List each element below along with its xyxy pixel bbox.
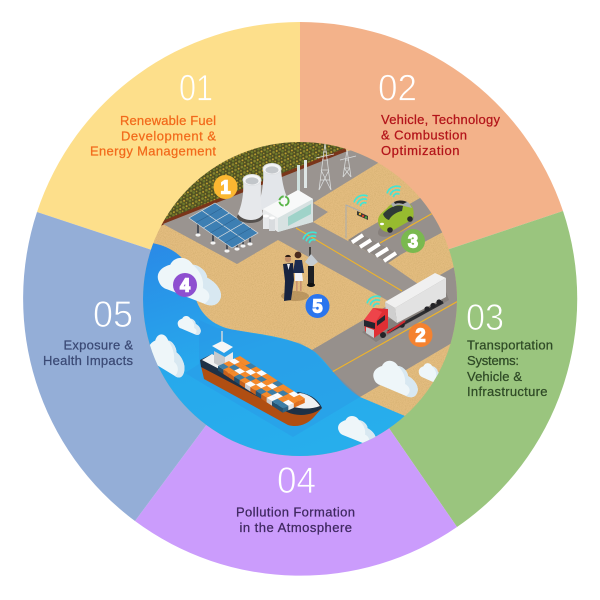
road shadow [362,292,449,342]
recycling mark [279,196,289,206]
label 03: Transportation [467,338,553,352]
trailer [385,273,446,323]
segment 04 background [135,299,457,576]
badge 3: 3 [408,232,418,252]
crosswalk [348,233,400,263]
wheels [380,299,442,338]
traffic signal [346,205,368,238]
solar panels [189,203,258,253]
label 02: & Combustion [381,128,467,142]
label 01: Renewable Fuel [120,113,216,128]
man [283,255,294,301]
container ship [200,331,322,426]
label 01 [90,113,216,159]
cloud behind badge 4 [158,258,221,305]
badge 2: 2 [415,326,426,346]
label 03 [467,338,553,399]
label 02: Optimization [381,143,460,158]
road centre lines [296,213,460,372]
hull band [200,354,322,415]
heading 02: 02 [378,68,417,108]
label 04: in the Atmosphere [240,520,352,535]
truck road [312,267,457,397]
small cloud over water [178,316,201,335]
transmission towers [316,143,356,190]
badge 4 [173,273,197,297]
green car [378,200,414,237]
badge 1 [214,175,238,199]
label 05: Health Impacts [43,353,134,368]
bridge block [212,331,233,369]
cloud at bottom water edge [338,416,376,445]
containers [218,356,305,413]
large cloud left edge [148,334,185,377]
panel supports [198,222,250,250]
label 05: Exposure & [64,338,133,352]
label 03: Vehicle & [467,369,522,384]
woman [293,252,304,291]
badge 3 [401,229,425,253]
cab [364,308,405,338]
storage tanks [263,214,275,231]
small cloud at lower right edge [419,363,443,384]
power plant [237,160,313,232]
chassis [388,302,443,332]
wifi signal: signal light [353,194,368,206]
truck [362,273,449,342]
heading 05: 05 [93,294,133,335]
car road [348,198,442,263]
segment 02 background [300,22,563,299]
badge 4: 4 [180,276,190,296]
segment 03 background [300,211,577,527]
segment 01 background [37,22,300,299]
roadside sensor [305,247,318,287]
crop field [162,142,344,223]
wifi signal: sensor [302,231,317,244]
wifi signal: car [386,185,401,198]
cloud on lower right sand [373,361,418,397]
label 05 [43,338,134,368]
field brown edge [160,150,346,224]
ship shadow plane [188,330,360,436]
grey lot and road to junction [163,140,418,303]
wifi signal: truck [366,295,381,308]
segment 05 background [23,212,300,521]
cooling tower back [260,163,286,210]
label 04: Pollution Formation [236,505,355,520]
badge 5: 5 [312,296,323,316]
badge 1: 1 [220,178,231,198]
cooling tower front [237,174,263,223]
label 01: Energy Management [90,144,216,159]
heading 04: 04 [277,460,316,501]
deck [202,354,320,409]
sand grain [154,149,452,456]
central isometric scene [143,142,457,456]
label 01: Development & [121,128,216,144]
hull lower [201,366,322,426]
sand ground [140,140,460,460]
badge 5 [306,294,330,318]
label 04 [236,505,355,535]
two people [281,252,309,301]
heading 03: 03 [466,297,504,338]
heading 01: 01 [179,68,213,108]
label 03: Systems: [467,353,519,368]
label 02: Vehicle, Technology [381,112,500,127]
label 02 [381,112,500,158]
striped stack [297,165,300,193]
badge 2 [408,323,432,347]
label 03: Infrastructure [467,384,548,399]
plant building [263,190,313,232]
water [143,243,405,456]
panel faces [189,203,258,248]
